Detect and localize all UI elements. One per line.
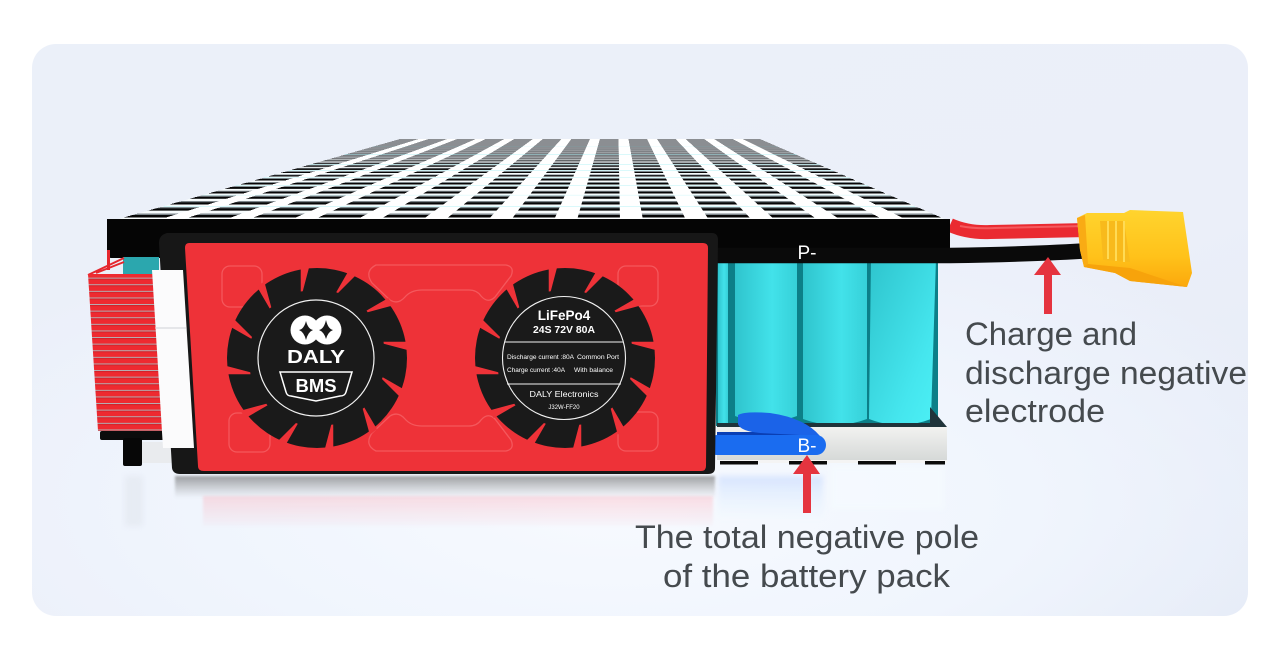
right fan label: specifications (472, 265, 658, 451)
right fan label: specifications: Common Port (577, 354, 619, 361)
black P- cable (716, 243, 1091, 264)
right fan label: specifications: Discharge current :80A (507, 354, 575, 361)
coil of balance wires (88, 250, 174, 466)
icon: BMS badge (280, 372, 352, 401)
label: charge and discharge negative electrode: Charge and (965, 316, 1137, 352)
embossed outlines (222, 265, 658, 452)
icon: DALY logo (290, 316, 342, 344)
right fan label: specifications: DALY Electronics (530, 389, 598, 399)
top grid of the battery pack (115, 139, 947, 220)
right fan label: specifications: With balance (574, 367, 614, 374)
BMS housing (159, 233, 718, 474)
white connector plugs (152, 270, 194, 448)
yellow XT connector (1077, 210, 1192, 287)
black slab below the top grid (107, 219, 950, 258)
arrow: to total negative pole (793, 455, 820, 513)
battery cells (716, 258, 938, 426)
arrow: to charge and discharge negative (1034, 257, 1061, 314)
icon: BMS badge: BMS (296, 376, 336, 396)
base plate (717, 407, 947, 464)
label: total negative pole of the battery pack: The total negative pole (635, 519, 979, 555)
floor reflection (125, 465, 945, 526)
right fan label: specifications: 24S 72V 80A (533, 325, 595, 336)
label: charge and discharge negative electrode: discharge negative (965, 355, 1247, 391)
label: total negative pole of the battery pack: of the battery pack (663, 558, 951, 594)
right fan label: specifications: J32W-FF20 (548, 405, 580, 411)
right fan label: specifications: LiFePo4 (538, 308, 591, 323)
red front panel (185, 243, 708, 471)
label: B-: B- (798, 436, 816, 457)
blue battery negative cable (717, 412, 820, 457)
left fan label: DALY BMS: DALY (287, 346, 346, 367)
left fan label: DALY BMS (224, 265, 410, 451)
red charge cable (950, 225, 1088, 232)
label: charge and discharge negative electrode: electrode (965, 393, 1105, 429)
right fan label: specifications: Charge current :40A (507, 367, 566, 374)
label: total negative pole of the battery pack (635, 519, 979, 594)
label: charge and discharge negative electrode (965, 316, 1247, 429)
label: P-: P- (798, 243, 816, 264)
